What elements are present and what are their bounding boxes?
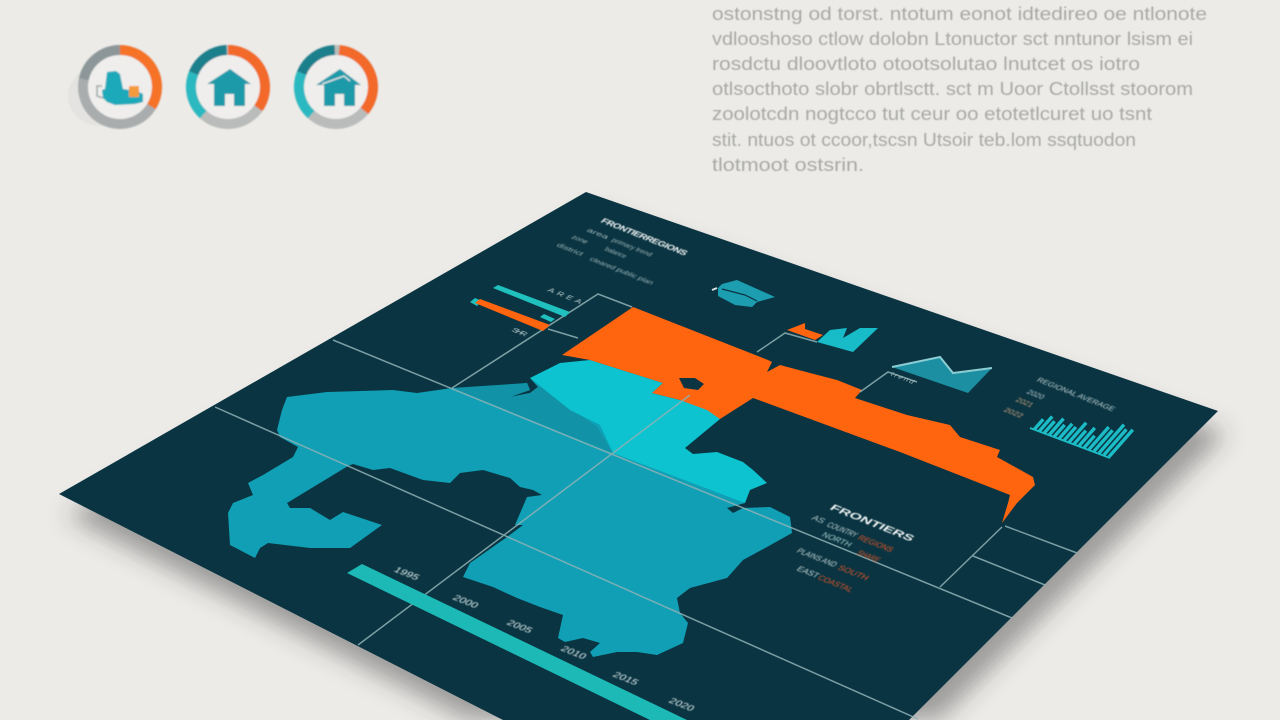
- timeline bar: [347, 564, 687, 720]
- paragraph text block: ostonstng od torst. ntotum eonot idtedireo oe ntlonote: [712, 4, 1207, 24]
- map: darker teal strip: [452, 378, 613, 453]
- paragraph text block: tlotmoot ostsrin.: [712, 155, 864, 175]
- panel: right legend text: 2021: [1014, 396, 1036, 409]
- panel: lower right legend: PLAINS AND: [795, 547, 840, 569]
- map: orange region: [562, 307, 1035, 523]
- panel: lower right legend: REGIONS: [856, 534, 896, 554]
- paragraph text block: zoolotcdn nogtcco tut ceur oo etotetlcuret uo tsnt: [712, 104, 1152, 124]
- map: lake hole: [679, 378, 704, 390]
- icon: house ring one: [176, 35, 280, 139]
- isometric dark board: [59, 192, 1218, 720]
- panel: top left legend: zone: [570, 233, 590, 245]
- panel: top left legend: district: [555, 241, 586, 257]
- icon: graduation cap: [712, 280, 775, 307]
- chart: left horizontal bars: AREA: [546, 286, 585, 305]
- panel: lower right legend: COASTAL: [816, 574, 856, 594]
- panel: lower right legend: COUNTRY: [825, 521, 860, 539]
- grid lines: [215, 294, 1077, 719]
- timeline labels: 2015: [610, 671, 641, 687]
- icon row: [68, 35, 388, 139]
- panel: top left legend: [555, 217, 690, 286]
- panel: right legend text: 2020: [1025, 388, 1047, 401]
- board shadow: [62, 414, 1232, 720]
- panel: right legend text: 2022: [1002, 406, 1026, 419]
- lower legend title: FRONTIERS: [827, 503, 917, 543]
- chart: small orange and cyan area: [787, 323, 878, 352]
- chart: left horizontal bars: [470, 285, 585, 338]
- chart: teal area with highlight: trend: [889, 370, 917, 385]
- paragraph text block: [712, 4, 1207, 175]
- paragraph text block: vdlooshoso ctlow dolobn Ltonuctor sct nntunor lsism ei: [712, 29, 1193, 49]
- chart: teal area with highlight: [889, 357, 992, 393]
- panel: lower right legend: EAST: [795, 565, 822, 580]
- panel: top left legend: area: [585, 226, 612, 241]
- paragraph text block: stit. ntuos ot ccoor,tscsn Utsoir teb.lom ssqtuodon: [712, 130, 1136, 150]
- chart: left horizontal bars: SHR: [510, 326, 530, 338]
- panel: top left legend: primary trend: [610, 236, 655, 258]
- panel: right legend text: REGIONAL AVERAGE: [1035, 376, 1118, 413]
- timeline labels: 1995: [391, 566, 422, 582]
- panel: right legend text: [1002, 376, 1118, 419]
- paragraph text block: otlsocthoto slobr obrtlsctt. sct m Uoor Ctollsst stoorom: [712, 79, 1193, 99]
- icon: house ring two: [284, 35, 388, 139]
- paragraph text block: rosdctu dloovtloto otootsolutao lnutcet os iotro: [712, 54, 1140, 74]
- icon: factory ring: [68, 43, 164, 131]
- timeline labels: 2005: [504, 619, 535, 635]
- panel: lower right legend: SHARE: [855, 549, 883, 564]
- timeline labels: 2020: [666, 697, 697, 713]
- panel: top left legend: balance: [603, 245, 629, 259]
- legend title: FRONTIERREGIONS: [599, 217, 690, 257]
- timeline labels: [391, 566, 697, 713]
- panel: top left legend: cleared public plan: [588, 255, 656, 286]
- panel: lower right legend: NORTH: [820, 531, 854, 548]
- map: cyan region: [530, 360, 767, 503]
- panel: lower right legend: AS: [810, 514, 827, 525]
- map: teal region: [228, 378, 792, 657]
- panel: lower right legend: [795, 503, 917, 594]
- timeline labels: 2010: [558, 645, 589, 661]
- chart: perspective bars: [1030, 416, 1133, 458]
- panel: lower right legend: SOUTH: [836, 564, 871, 582]
- timeline labels: 2000: [450, 594, 481, 610]
